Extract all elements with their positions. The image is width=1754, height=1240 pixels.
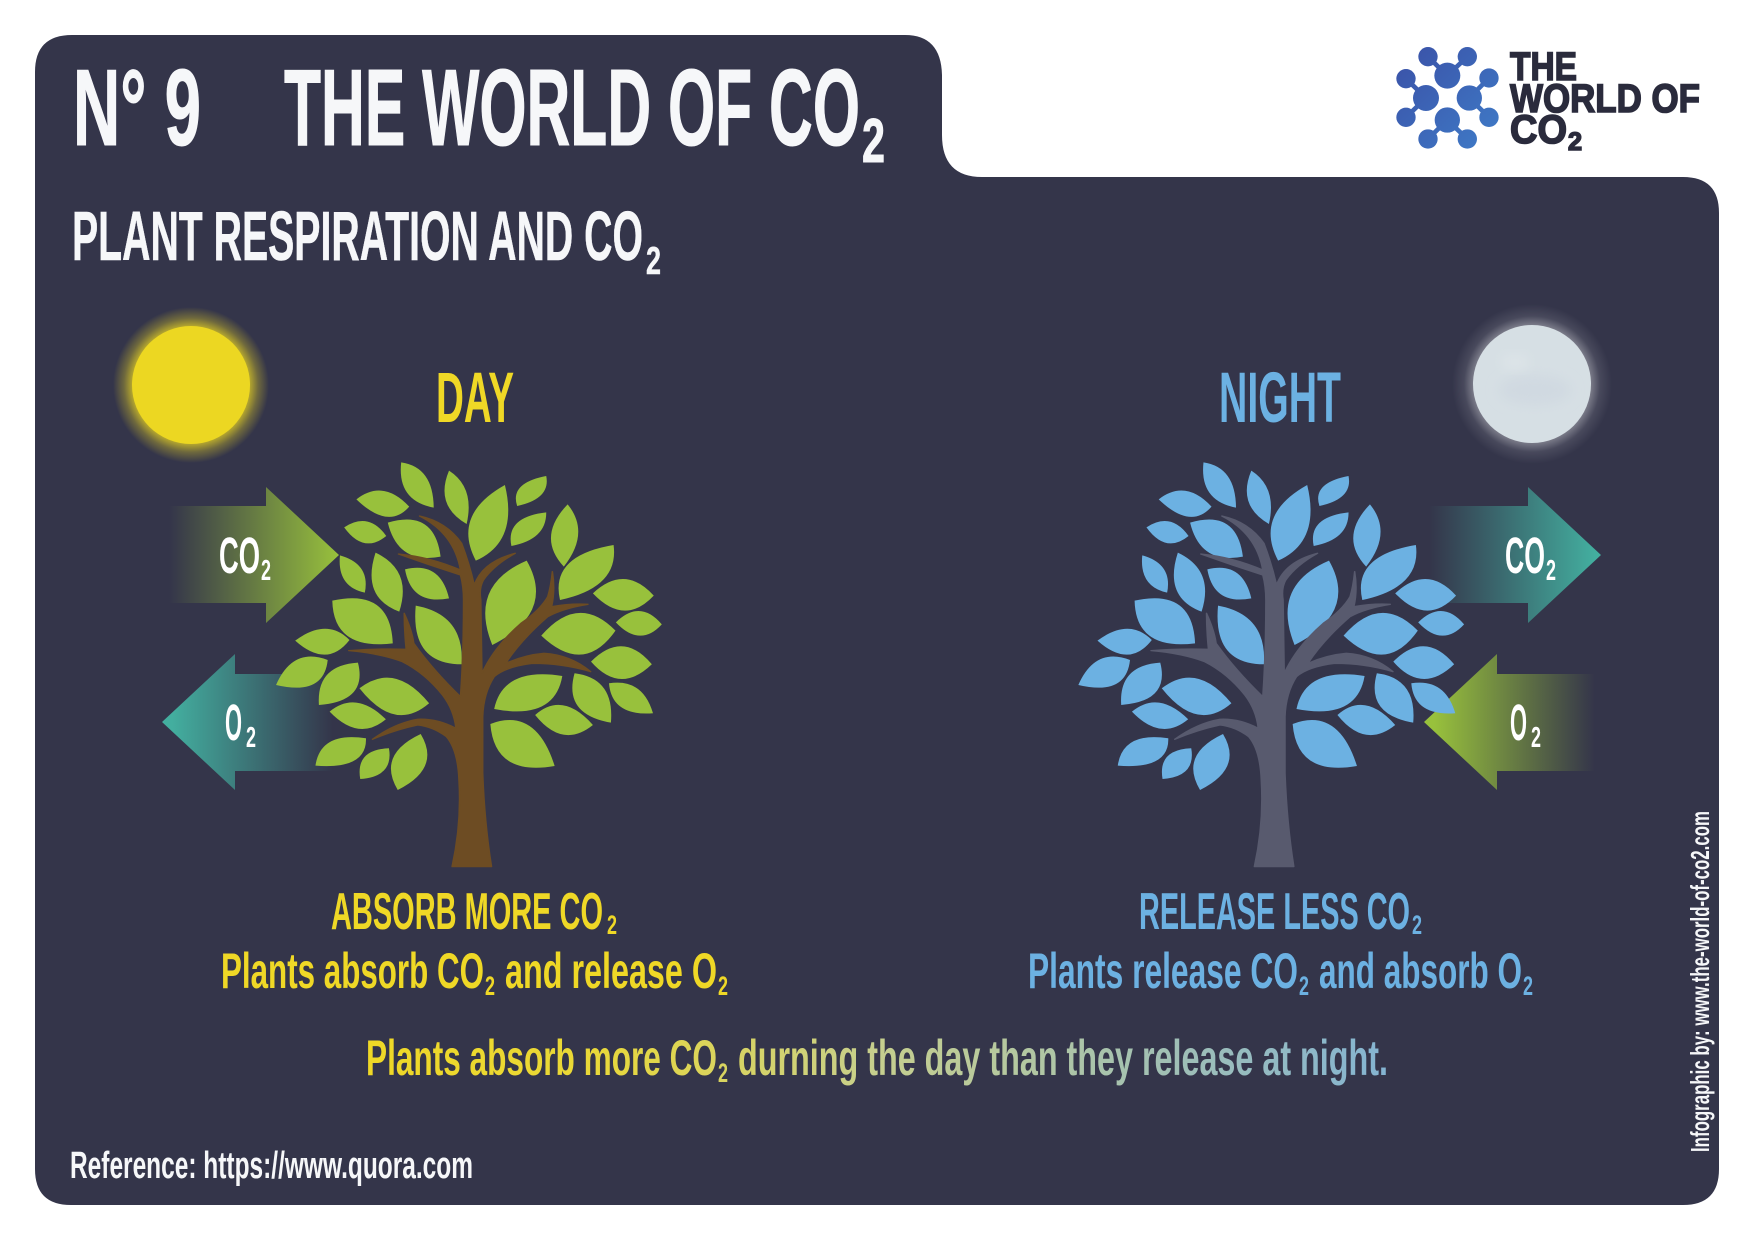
- logo wordmark: 2: [1568, 128, 1582, 156]
- text block: day result: 2: [718, 971, 728, 1001]
- tree: day, green leaves: [276, 462, 662, 867]
- text block: day result: 2: [607, 910, 617, 940]
- arrow: night O2 absorbed: 2: [1531, 722, 1541, 754]
- text block: day result: [221, 883, 728, 1001]
- arrow: night O2 absorbed: O: [1510, 694, 1527, 751]
- text block: summary sentence: Plants absorb more CO: [366, 1030, 717, 1086]
- text block: day result: and release O: [505, 943, 717, 999]
- text block: day result: ABSORB MORE CO: [331, 883, 603, 941]
- arrow: day CO2 absorbed: 2: [261, 555, 271, 587]
- logo: [1396, 45, 1700, 156]
- subtitle: PLANT RESPIRATION AND CO: [72, 197, 643, 275]
- text block: summary sentence: durning the day than they release at night.: [738, 1030, 1388, 1086]
- reference: Reference: https://www.quora.com: [70, 1145, 473, 1187]
- logo wordmark: CO: [1510, 108, 1567, 152]
- text block: night result: and absorb O: [1319, 943, 1522, 999]
- subtitle: 2: [646, 240, 661, 283]
- icon: sun: [113, 307, 269, 463]
- arrow: night O2 absorbed: [1424, 654, 1595, 790]
- tree: night, blue leaves: [1078, 462, 1464, 867]
- text block: summary sentence: 2: [718, 1058, 728, 1088]
- logo wordmark: [1510, 45, 1700, 156]
- text block: night result: 2: [1523, 971, 1533, 1001]
- heading: day: DAY: [436, 359, 514, 438]
- icon: moon: [1452, 304, 1612, 464]
- arrow: night CO2 released: CO: [1505, 527, 1545, 584]
- icon: molecule network: [1396, 47, 1499, 149]
- text block: day result: 2: [485, 971, 495, 1001]
- arrow: night CO2 released: [1429, 487, 1601, 623]
- heading: night: NIGHT: [1219, 359, 1341, 438]
- logo wordmark: THE: [1510, 45, 1577, 89]
- title: [73, 47, 885, 176]
- arrow: day O2 released: [162, 654, 333, 790]
- subtitle: [72, 197, 661, 283]
- arrow: day O2 released: O: [225, 694, 242, 751]
- text block: night result: RELEASE LESS CO: [1139, 883, 1410, 941]
- arrow: night CO2 released: 2: [1546, 555, 1556, 587]
- text block: night result: Plants release CO: [1028, 943, 1298, 999]
- credit: vertical: Infographic by: www.the-world-of-co2.com: [1685, 811, 1715, 1152]
- title: THE WORLD OF CO: [284, 47, 860, 169]
- text block: day result: Plants absorb CO: [221, 943, 484, 999]
- text block: night result: 2: [1299, 971, 1309, 1001]
- text block: night result: [1028, 883, 1533, 1001]
- logo wordmark: WORLD OF: [1510, 77, 1700, 121]
- arrow: day CO2 absorbed: [169, 487, 339, 623]
- arrow: day CO2 absorbed: CO: [219, 527, 260, 584]
- text block: summary sentence: [366, 1030, 1388, 1088]
- arrow: day O2 released: 2: [246, 722, 256, 754]
- text block: night result: 2: [1412, 910, 1422, 940]
- title: 2: [862, 107, 885, 176]
- title: N° 9: [73, 47, 201, 169]
